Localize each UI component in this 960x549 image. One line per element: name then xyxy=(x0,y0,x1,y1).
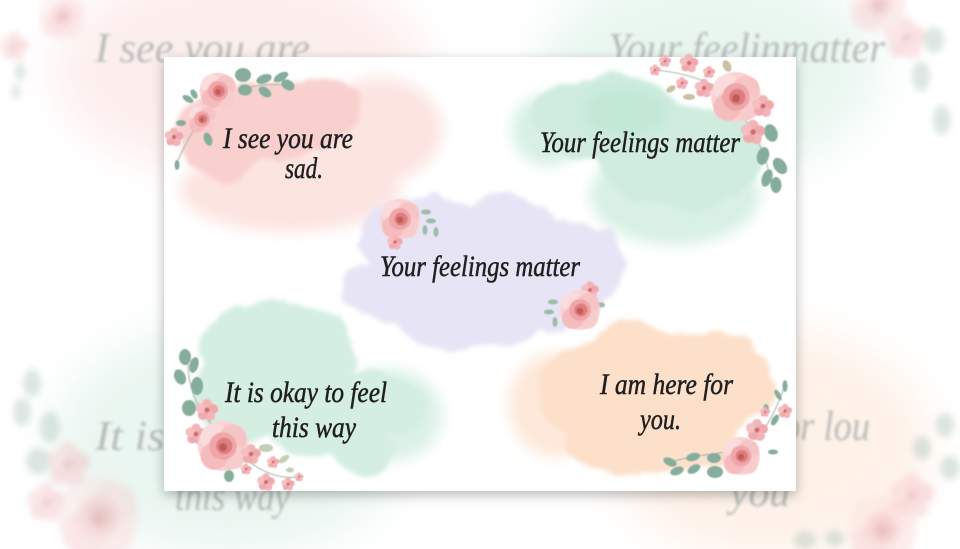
floral: bottom-left corner xyxy=(172,349,303,491)
blurred background collage: this way xyxy=(175,474,290,520)
blurred background collage: you xyxy=(726,470,790,516)
floral: lavender card top-left xyxy=(380,199,438,250)
panel: lavender watercolor "Your feelings matter" xyxy=(344,194,624,350)
panel: lavender watercolor "Your feelings matter": Your feelings matter xyxy=(380,250,580,283)
panel: pink watercolor "I see you are sad." xyxy=(180,78,442,232)
panel: green watercolor "Your feelings matter": Your feelings matter xyxy=(540,126,740,159)
floral: top-left corner xyxy=(165,68,297,170)
panel: peach watercolor "I am here for you.": I am here for xyxy=(599,368,733,401)
panel: peach watercolor "I am here for you.": you. xyxy=(638,403,681,436)
floral: lavender card bottom-right xyxy=(544,281,605,330)
blurred background collage: It is xyxy=(94,414,165,460)
panel: pink watercolor "I see you are sad.": I see you are xyxy=(222,122,353,155)
panel: peach watercolor "I am here for you." xyxy=(509,320,771,475)
floral: top-right corner xyxy=(650,54,790,193)
panel: green watercolor "It is okay to feel this way" xyxy=(196,300,442,474)
panel: green watercolor "It is okay to feel this way": this way xyxy=(272,411,357,444)
panel: pink watercolor "I see you are sad.": sad. xyxy=(285,152,323,185)
blurred background collage: Your feelinmatter xyxy=(608,26,886,72)
floral: bottom-right corner xyxy=(662,380,792,478)
blurred background collage: I see you are xyxy=(94,26,310,72)
panel: green watercolor "Your feelings matter" xyxy=(512,76,764,245)
white card xyxy=(164,57,796,491)
blurred background collage: for lou xyxy=(772,404,870,450)
panel: green watercolor "It is okay to feel this way": It is okay to feel xyxy=(224,376,387,409)
